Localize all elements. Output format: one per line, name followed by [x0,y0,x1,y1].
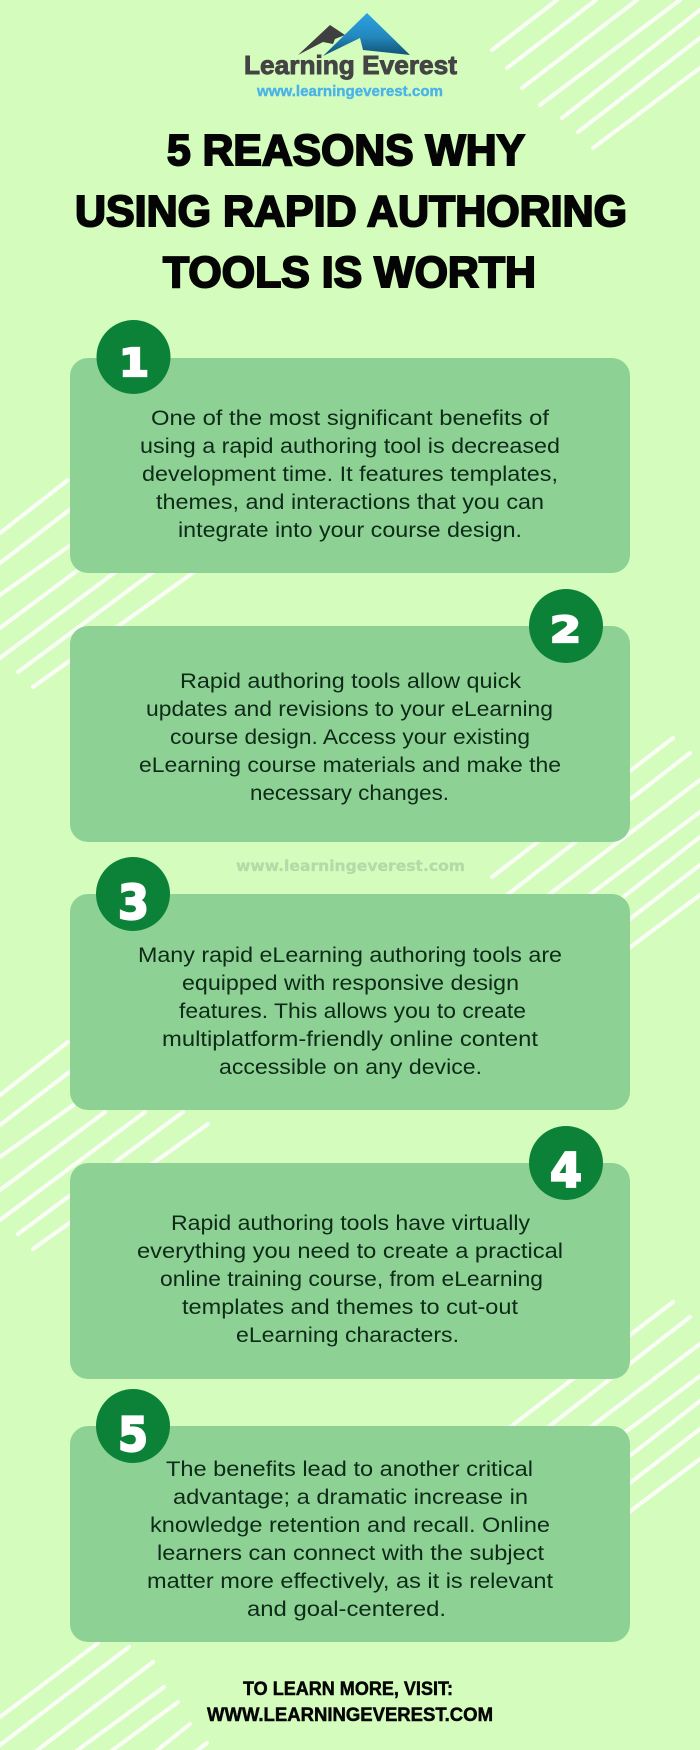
number badge 5: 5 [118,1408,148,1463]
title: USING RAPID AUTHORING [75,187,627,236]
footer call to action: WWW.LEARNINGEVEREST.COM [207,1705,493,1726]
number badge 5 [96,1389,170,1463]
text: reason 3: Many rapid eLearning authoring tools are [138,944,562,967]
text: reason 5: advantage; a dramatic increase in [173,1486,528,1509]
text: reason 5: and goal-centered. [247,1598,446,1621]
text: reason 4 [137,1212,563,1347]
panel: reason 2 [70,589,630,842]
text: reason 1 [140,407,560,542]
number badge 2 [529,589,603,663]
number badge 2: 2 [550,610,581,651]
icon: grey mountain [298,25,345,55]
logo: Learning Everest [244,13,457,100]
card background 2 [70,626,630,842]
text: reason 3: multiplatform-friendly online content [162,1028,538,1051]
text: reason 2: eLearning course materials and make the [139,754,561,777]
text: reason 2: course design. Access your existing [170,726,530,749]
text: reason 1: integrate into your course design. [178,519,522,542]
text: reason 2: updates and revisions to your eLearning [146,698,553,721]
text: reason 3: equipped with responsive design [182,972,519,995]
number badge 1 [96,320,170,394]
panel: reason 4 [70,1126,630,1379]
logo url: www.learningeverest.com [256,83,443,100]
text: reason 5: matter more effectively, as it is relevant [147,1570,553,1593]
icon: blue mountain [323,13,410,56]
text: reason 2: Rapid authoring tools allow quick [180,670,522,693]
watermark url: www.learningeverest.com [236,857,465,875]
footer call to action: TO LEARN MORE, VISIT: [243,1679,453,1700]
number badge 1: 1 [119,341,149,385]
card background 4 [70,1163,630,1379]
panel: reason 3 [70,857,630,1110]
title: TOOLS IS WORTH [163,248,536,297]
number badge 4: 4 [550,1144,582,1199]
text: reason 5: learners can connect with the subject [157,1542,544,1565]
text: reason 4: online training course, from eLearning [160,1268,543,1291]
card background 1 [70,358,630,573]
text: reason 1: One of the most significant benefits of [151,407,549,430]
text: reason 1: using a rapid authoring tool is decreased [140,435,560,458]
card background 5 [70,1426,630,1642]
text: reason 3 [138,944,562,1079]
text: reason 2 [139,670,561,805]
text: reason 4: eLearning characters. [236,1324,459,1347]
card background 3 [70,894,630,1110]
text: reason 3: features. This allows you to create [179,1000,526,1023]
number badge 3 [96,857,170,931]
footer call to action [207,1679,493,1726]
text: reason 4: everything you need to create a practical [137,1240,563,1263]
title [75,126,627,297]
panel: reason 1 [70,320,630,573]
text: reason 5 [147,1458,553,1621]
text: reason 4: Rapid authoring tools have virtually [171,1212,531,1235]
text: reason 3: accessible on any device. [219,1056,482,1079]
text: reason 4: templates and themes to cut-out [182,1296,518,1319]
text: reason 2: necessary changes. [250,782,449,805]
text: reason 5: knowledge retention and recall. Online [150,1514,550,1537]
title: 5 REASONS WHY [167,126,525,175]
text: reason 1: development time. It features templates, [142,463,558,486]
logo name: Learning Everest [244,50,457,80]
number badge 4 [529,1126,603,1200]
panel: reason 5 [70,1389,630,1642]
text: reason 1: themes, and interactions that you can [156,491,544,514]
text: reason 5: The benefits lead to another critical [166,1458,533,1481]
number badge 3: 3 [118,876,149,931]
